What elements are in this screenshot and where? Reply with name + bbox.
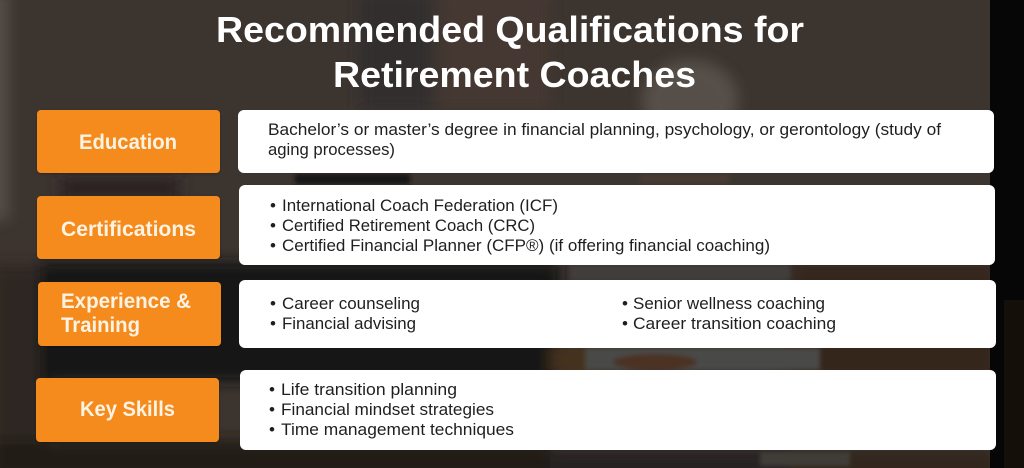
title: Retirement Coaches <box>333 54 696 95</box>
panel: certifications list: • <box>270 236 276 255</box>
label: key skills <box>36 378 219 442</box>
panel: experience list: Financial advising <box>282 314 416 333</box>
label: certifications <box>37 196 220 259</box>
panel: experience list: • <box>622 294 628 313</box>
panel: certifications list: • <box>270 196 276 215</box>
panel: experience list: Career transition coaching <box>633 314 836 333</box>
panel: key skills list: Time management techniques <box>281 420 514 439</box>
panel: education details: Bachelor’s or master’s degree in financial planning, psychology, or gerontology (study of <box>268 120 941 139</box>
panel: experience list: Senior wellness coaching <box>633 294 825 313</box>
label: certifications: Certifications <box>61 218 196 241</box>
label: education: Education <box>79 131 177 154</box>
panel: education details: aging processes) <box>268 140 395 159</box>
panel: experience list: • <box>622 314 628 333</box>
panel: key skills list: Life transition planning <box>281 380 457 399</box>
label: experience and training: Experience & <box>61 290 191 313</box>
panel: key skills list <box>240 370 996 450</box>
label: experience and training <box>38 282 221 346</box>
panel: key skills list: Financial mindset strategies <box>281 400 494 419</box>
row: experience and training <box>38 280 996 348</box>
panel: certifications list <box>239 185 995 265</box>
panel: key skills list: • <box>269 420 275 439</box>
panel: certifications list: Certified Retirement Coach (CRC) <box>282 216 535 235</box>
panel: experience list: • <box>270 314 276 333</box>
panel: experience list: • <box>270 294 276 313</box>
panel: experience list: Career counseling <box>282 294 420 313</box>
panel: education details <box>238 110 994 173</box>
panel: key skills list: • <box>269 400 275 419</box>
panel: certifications list: • <box>270 216 276 235</box>
row: key skills <box>36 370 996 450</box>
title: Recommended Qualifications for <box>216 9 804 50</box>
panel: certifications list: International Coach Federation (ICF) <box>282 196 558 215</box>
panel: key skills list: • <box>269 380 275 399</box>
title <box>216 9 804 95</box>
panel: certifications list: Certified Financial Planner (CFP®) (if offering financial coaching) <box>282 236 770 255</box>
label: experience and training: Training <box>61 314 140 337</box>
label: education <box>37 110 220 173</box>
row: certifications <box>37 185 995 265</box>
panel: experience list <box>239 280 996 348</box>
row: education <box>37 110 994 173</box>
label: key skills: Key Skills <box>80 398 175 421</box>
